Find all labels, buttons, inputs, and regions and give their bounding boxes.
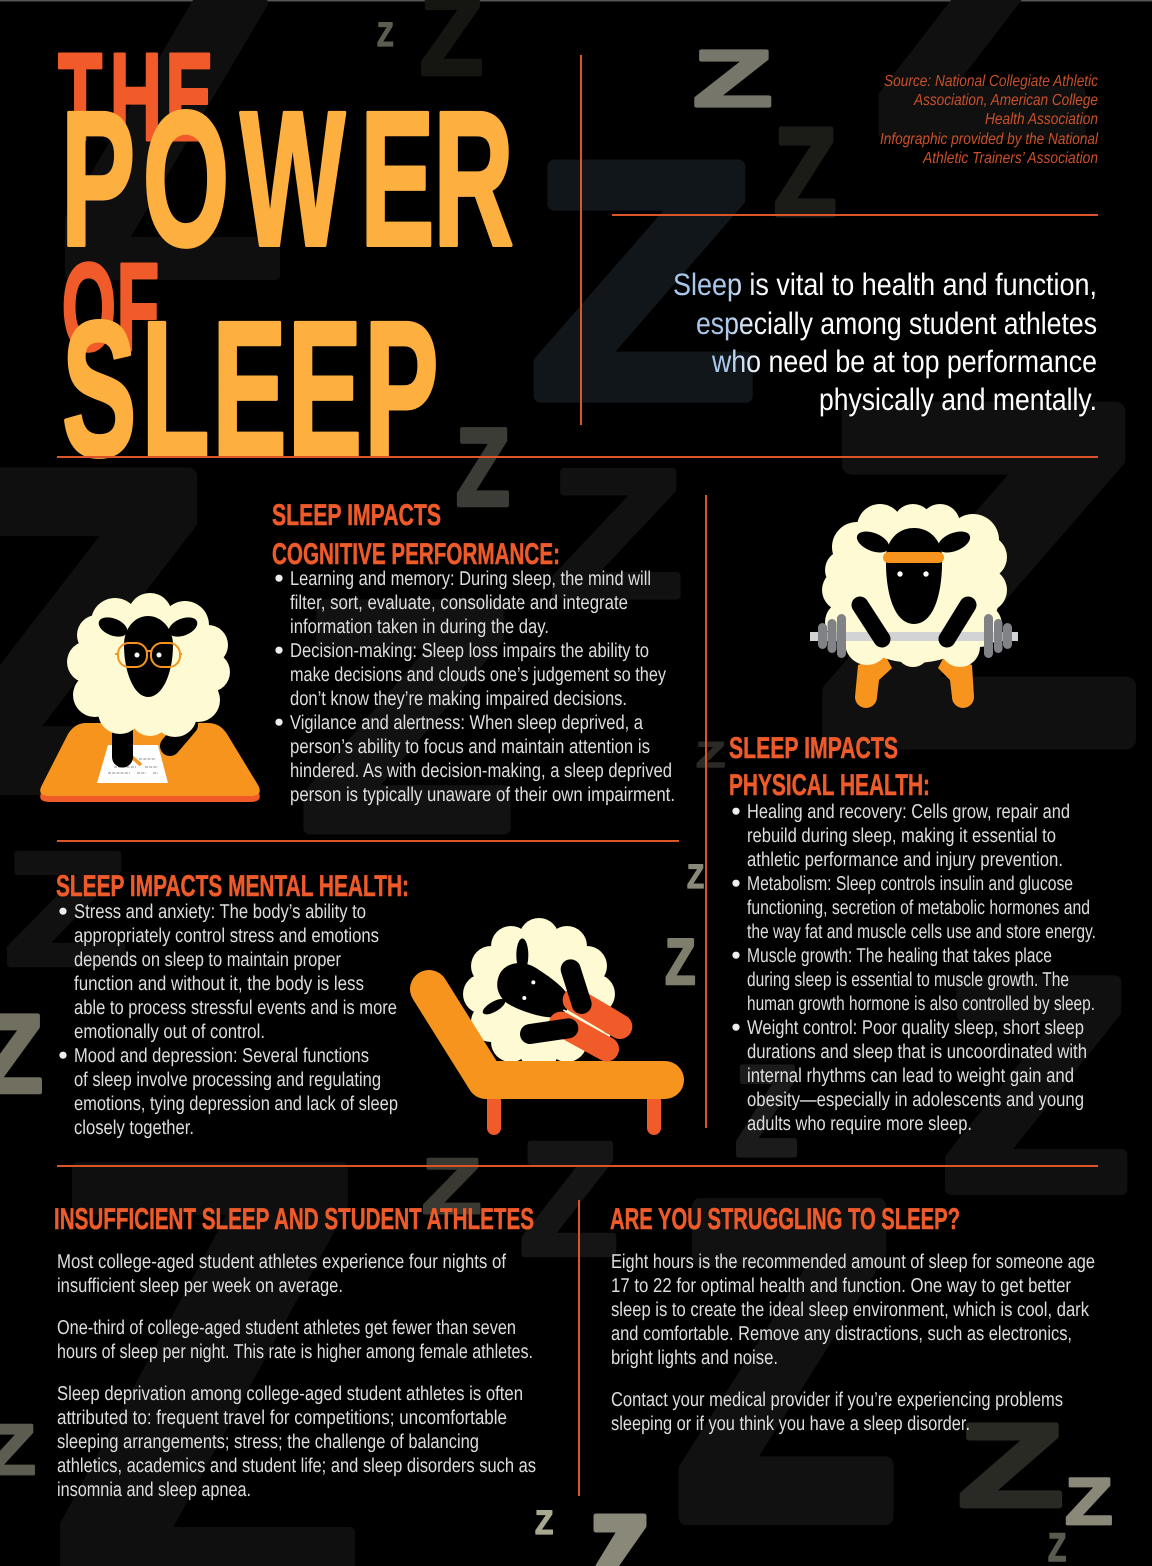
background pattern of faint sleeping Z letters: Z (456, 406, 510, 529)
bullet list: mental health: emotions, tying depression and lack of sleep (74, 1093, 398, 1115)
heading: cognitive performance (272, 499, 560, 571)
bullet list: physical health: adults who require more sleep. (747, 1113, 972, 1135)
text block: struggling to sleep: sleeping or if you think you have a sleep disorder. (611, 1413, 970, 1435)
text block: struggling to sleep: 17 to 22 for optimal health and function. One way to get better (611, 1275, 1071, 1297)
heading: insufficient sleep: INSUFFICIENT SLEEP AND STUDENT ATHLETES (54, 1203, 534, 1236)
bullet list: mental health: closely together. (74, 1117, 194, 1139)
text block: insufficient sleep: insufficient sleep per week on average. (57, 1275, 343, 1297)
panel: physical health (729, 504, 1096, 1135)
bullet list: physical health: durations and sleep that is uncoordinated with (747, 1041, 1087, 1063)
source credits (880, 73, 1098, 167)
bullet list: mental health: able to process stressful events and is more (74, 997, 397, 1019)
text block: struggling to sleep (611, 1251, 1095, 1435)
heading: physical health (729, 732, 930, 802)
source credits: Source: National Collegiate Athletic (884, 73, 1098, 90)
heading: cognitive performance: SLEEP IMPACTS (272, 499, 441, 532)
bullet list: mental health: function and without it, the body is less (74, 973, 364, 995)
title: The Power of Sleep: SLEEP (62, 281, 439, 496)
bullet list: cognitive performance: don’t know they’re making impaired decisions. (290, 688, 627, 710)
bullet list: cognitive performance: make decisions and clouds one’s judgement so they (290, 664, 666, 686)
text block: insufficient sleep: hours of sleep per night. This rate is higher among female athletes. (57, 1341, 533, 1363)
text block: insufficient sleep (57, 1251, 536, 1501)
source credits: Health Association (985, 111, 1098, 128)
background pattern of faint sleeping Z letters: Z (377, 15, 393, 53)
intro statement: who need be at top performance (711, 344, 1097, 379)
background pattern of faint sleeping Z letters: Z (550, 433, 683, 636)
bullet list: physical health: obesity—especially in adolescents and young (747, 1089, 1084, 1111)
bullet list: physical health: Healing and recovery: Cells grow, repair and (747, 801, 1070, 823)
intro statement (673, 267, 1097, 417)
title: The Power of Sleep (58, 28, 514, 496)
icon: studying sheep at desk with glasses (40, 593, 260, 802)
heading: cognitive performance: COGNITIVE PERFORMANCE: (272, 538, 560, 571)
bullet list: mental health: of sleep involve processing and regulating (74, 1069, 381, 1091)
source credits: Association, American College (913, 92, 1098, 109)
icon: sheep lifting barbell (810, 504, 1018, 708)
bullet list: physical health: Weight control: Poor quality sleep, short sleep (747, 1017, 1084, 1039)
intro statement: especially among student athletes (696, 306, 1097, 341)
title: The Power of Sleep: THE (58, 28, 214, 167)
background pattern of faint sleeping Z letters: Z (696, 735, 725, 775)
bullet list: mental health: depends on sleep to maintain proper (74, 949, 341, 971)
bullet list: mental health (59, 901, 398, 1139)
title: The Power of Sleep: POWER (61, 71, 514, 286)
bullet list: cognitive performance (275, 568, 675, 806)
text block: insufficient sleep: One-third of college-aged student athletes get fewer than seven (57, 1317, 516, 1339)
panel: mental health (56, 870, 665, 1139)
panel: cognitive performance (40, 499, 675, 806)
heading: mental health: SLEEP IMPACTS MENTAL HEALTH: (56, 870, 409, 903)
title: The Power of Sleep: OF (62, 238, 159, 377)
panel: are you struggling to sleep (610, 1203, 1095, 1435)
bullet list: cognitive performance: Vigilance and alertness: When sleep deprived, a (290, 712, 644, 734)
bullet list: mental health: Stress and anxiety: The body’s ability to (74, 901, 366, 923)
bullet list: physical health: during sleep is essential to muscle growth. The (747, 969, 1069, 991)
bullet list: mental health: appropriately control stress and emotions (74, 925, 379, 947)
bullet list: cognitive performance: information taken in during the day. (290, 616, 549, 638)
bullet list: cognitive performance: Decision-making: Sleep loss impairs the ability to (290, 640, 649, 662)
bullet list: physical health: Metabolism: Sleep controls insulin and glucose (747, 873, 1073, 895)
bullet list: cognitive performance: hindered. As with decision-making, a sleep deprived (290, 760, 672, 782)
intro statement: physically and mentally. (819, 382, 1097, 417)
background pattern of faint sleeping Z letters: Z (5, 820, 127, 999)
text block: insufficient sleep: attributed to: frequent travel for competitions; uncomfortable (57, 1407, 507, 1429)
background pattern of faint sleeping Z letters: Z (735, 1040, 798, 1183)
background pattern of faint sleeping Z letters: Z (774, 102, 836, 242)
background pattern of faint sleeping Z letters: Z (687, 857, 704, 895)
bullet list: physical health (732, 801, 1096, 1135)
bullet list: cognitive performance: Learning and memory: During sleep, the mind will (290, 568, 651, 590)
text block: insufficient sleep: Sleep deprivation among college-aged student athletes is often (57, 1383, 523, 1405)
background pattern of faint sleeping Z letters: Z (520, 1110, 618, 1289)
background pattern of faint sleeping Z letters: Z (817, 310, 1141, 845)
text block: insufficient sleep: insomnia and sleep apnea. (57, 1479, 251, 1501)
background pattern of faint sleeping Z letters: Z (530, 95, 756, 469)
intro statement: Sleep is vital to health and function, (673, 267, 1097, 302)
source credits: Infographic provided by the National (880, 131, 1098, 148)
text block: insufficient sleep: sleeping arrangements; stress; the challenge of balancing (57, 1431, 479, 1453)
background pattern of faint sleeping Z letters: Z (942, 917, 1130, 1255)
bullet list: physical health: rebuild during sleep, making it essential to (747, 825, 1056, 847)
bullet list: mental health: emotionally out of control. (74, 1021, 265, 1043)
bullet list: cognitive performance: person is typically unaware of their own impairment. (290, 784, 675, 806)
bullet list: physical health: internal rhythms can lead to weight gain and (747, 1065, 1074, 1087)
background pattern of faint sleeping Z letters: Z (665, 925, 696, 998)
background pattern of faint sleeping Z letters: Z (422, 1143, 481, 1230)
icon: sheep relaxing on a lounge chair (429, 918, 665, 1128)
background pattern of faint sleeping Z letters: Z (1065, 1465, 1113, 1539)
background pattern of faint sleeping Z letters: Z (693, 34, 772, 124)
background pattern of faint sleeping Z letters: Z (300, 537, 514, 899)
text block: struggling to sleep: bright lights and noise. (611, 1347, 778, 1369)
bullet list: cognitive performance: filter, sort, evaluate, consolidate and integrate (290, 592, 628, 614)
source credits: Athletic Trainers’ Association (922, 150, 1098, 167)
bullet list: mental health: Mood and depression: Several functions (74, 1045, 369, 1067)
bullet list: cognitive performance: person’s ability to focus and maintain attention is (290, 736, 650, 758)
heading: physical health: SLEEP IMPACTS (729, 732, 898, 765)
bullet list: physical health: athletic performance and injury prevention. (747, 849, 1063, 871)
text block: insufficient sleep: athletics, academics and student life; and sleep disorders such as (57, 1455, 536, 1477)
bullet list: physical health: Muscle growth: The healing that takes place (747, 945, 1052, 967)
text block: struggling to sleep: Contact your medical provider if you’re experiencing problems (611, 1389, 1063, 1411)
background pattern of faint sleeping Z letters: Z (958, 1400, 1064, 1532)
heading: physical health: PHYSICAL HEALTH: (729, 769, 930, 802)
heading: struggling to sleep: ARE YOU STRUGGLING TO SLEEP? (610, 1203, 960, 1236)
background pattern of faint sleeping Z letters: Z (535, 1503, 553, 1541)
panel: insufficient sleep and student athletes (54, 1203, 536, 1501)
text block: insufficient sleep: Most college-aged student athletes experience four nights of (57, 1251, 506, 1273)
